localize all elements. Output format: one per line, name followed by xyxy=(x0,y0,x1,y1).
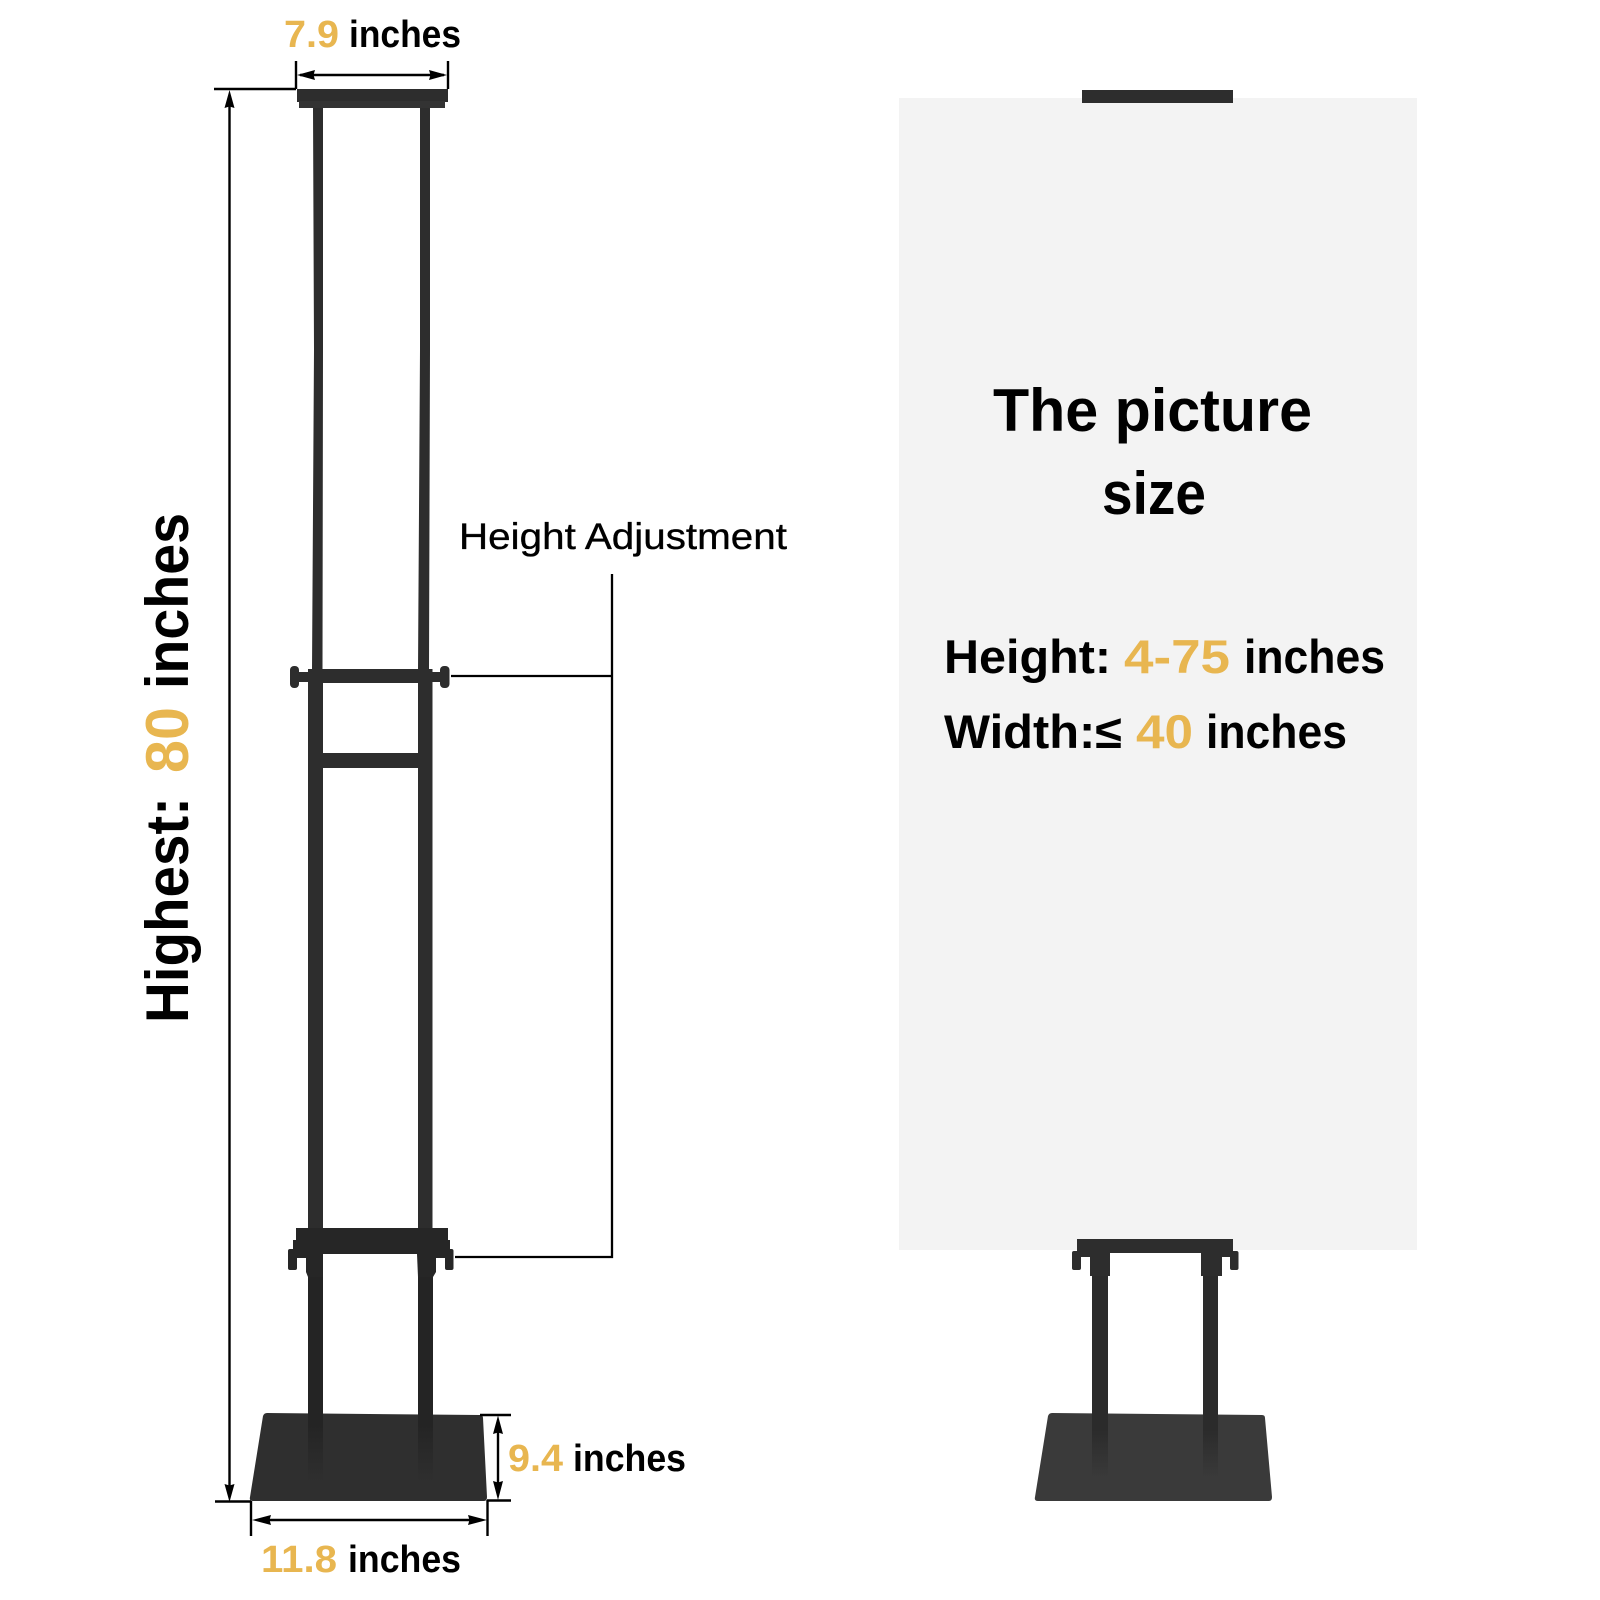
weighted base plate xyxy=(250,1413,487,1501)
text: width limit xyxy=(944,705,1347,758)
adjustment frame with knobs xyxy=(290,666,450,1239)
text: height range xyxy=(944,630,1385,683)
top clip on poster xyxy=(1082,90,1233,103)
label: top width: 7.9 xyxy=(284,14,339,56)
label: overall height: 80 xyxy=(134,707,201,773)
top clip bar xyxy=(297,89,448,108)
poles xyxy=(1092,1276,1218,1478)
label: top width: inches xyxy=(349,14,461,56)
text: height range: 4-75 xyxy=(1124,630,1230,683)
callout: height adjustment leader lines xyxy=(451,574,612,1257)
upper uprights xyxy=(312,108,430,670)
label: height adjustment: Height Adjustment xyxy=(459,516,788,557)
text: width limit: Width:≤ xyxy=(944,705,1122,758)
heading: the picture size: size xyxy=(1102,460,1206,527)
lower clamp assembly xyxy=(288,1228,454,1277)
dimension: overall height arrow xyxy=(214,89,296,1502)
label: top width xyxy=(284,14,461,56)
stand: short front view behind poster xyxy=(1035,90,1272,1501)
lower clamp bar xyxy=(1072,1239,1238,1276)
dimension: base depth arrow xyxy=(480,1415,511,1500)
label: base width: inches xyxy=(348,1539,461,1581)
dimension: top width arrow xyxy=(296,61,448,89)
label: base width xyxy=(261,1539,461,1581)
label: overall height: Highest: xyxy=(134,797,201,1023)
label: base width: 11.8 xyxy=(261,1539,337,1581)
text: height range: inches xyxy=(1244,630,1385,683)
label: base depth xyxy=(508,1438,686,1480)
panel: picture size poster xyxy=(899,98,1417,1250)
text: height range: Height: xyxy=(944,630,1111,683)
label: base depth: inches xyxy=(573,1438,686,1480)
heading: the picture size xyxy=(993,377,1312,527)
heading: the picture size: The picture xyxy=(993,377,1312,444)
dimension: base width arrow xyxy=(251,1500,488,1536)
text: width limit: 40 xyxy=(1136,705,1193,758)
base plate xyxy=(1035,1413,1272,1501)
label: overall height xyxy=(134,513,201,1023)
label: overall height: inches xyxy=(134,513,201,689)
lower poles xyxy=(308,1277,433,1482)
label: base depth: 9.4 xyxy=(508,1438,563,1480)
text: width limit: inches xyxy=(1206,705,1347,758)
stand: full height side view xyxy=(250,89,487,1501)
